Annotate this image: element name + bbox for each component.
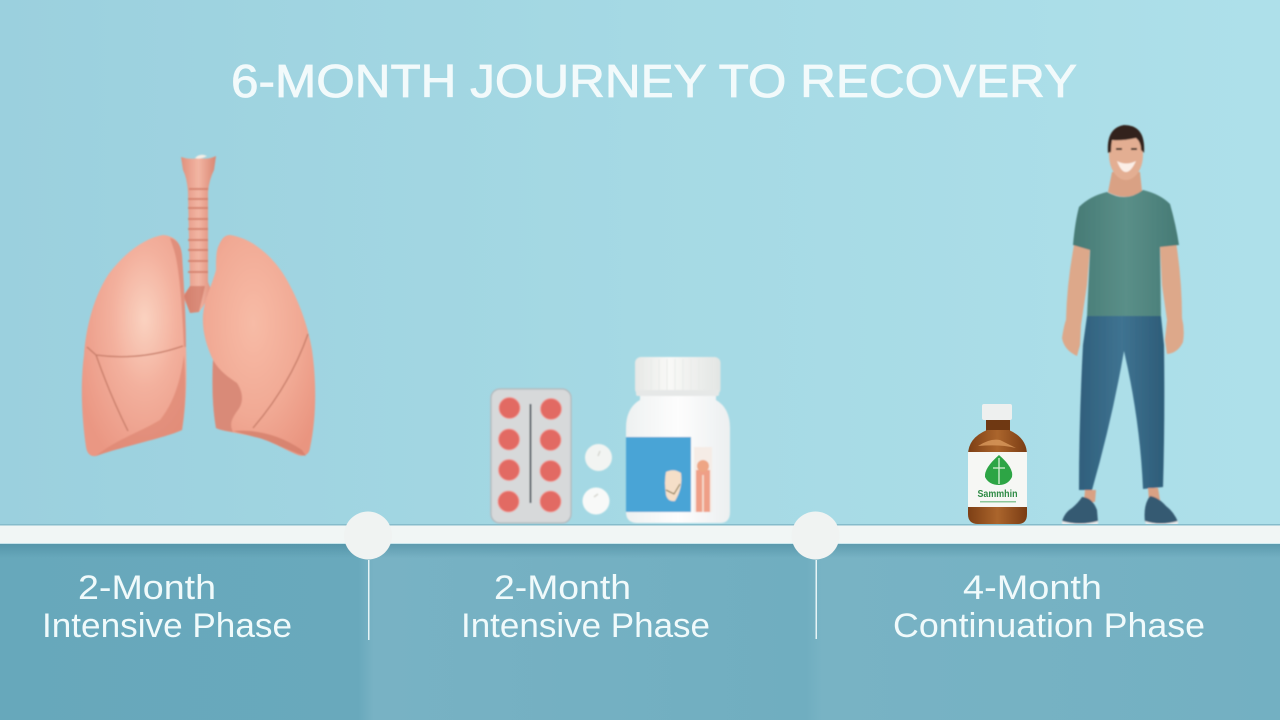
phase 1 label: Intensive Phase	[42, 607, 292, 645]
right lung	[203, 235, 315, 456]
trachea	[181, 155, 216, 313]
jeans	[1079, 316, 1164, 490]
phase 3 label	[893, 569, 1205, 645]
t-shirt	[1073, 190, 1179, 317]
neck	[1108, 172, 1142, 197]
icon: blister pack	[491, 389, 571, 523]
figure: healthy man	[1062, 125, 1184, 525]
phase 3 label: Continuation Phase	[893, 607, 1205, 645]
icon: amber syrup bottle: Sammhin	[978, 489, 1018, 500]
lower band	[0, 544, 1280, 720]
background	[0, 0, 1280, 545]
icon: amber syrup bottle	[968, 404, 1027, 524]
arms	[1062, 240, 1184, 356]
icon: loose white tablets	[582, 444, 612, 514]
phase 3 label: 4-Month	[963, 569, 1102, 607]
icon: white medicine bottle	[626, 357, 730, 523]
syrup label	[968, 452, 1027, 507]
phase 2 label	[461, 569, 710, 645]
timeline node 2	[792, 512, 840, 560]
shoes	[1062, 496, 1178, 524]
icon: lungs	[82, 155, 315, 456]
phase 2 label: Intensive Phase	[461, 607, 710, 645]
ankles	[1084, 488, 1160, 502]
phase 1 label: 2-Month	[78, 569, 216, 607]
head	[1108, 125, 1144, 180]
divider 2	[816, 560, 817, 639]
pills	[498, 398, 562, 512]
bottle label	[626, 437, 691, 512]
title: 6-MONTH JOURNEY TO RECOVERY	[231, 55, 1077, 107]
divider 1	[368, 560, 370, 640]
timeline node 1	[344, 512, 392, 560]
timeline bar	[0, 512, 1280, 560]
band shading	[0, 544, 1280, 558]
phase 2 label: 2-Month	[494, 569, 631, 607]
left lung	[82, 235, 186, 456]
phase 1 label	[42, 569, 292, 645]
